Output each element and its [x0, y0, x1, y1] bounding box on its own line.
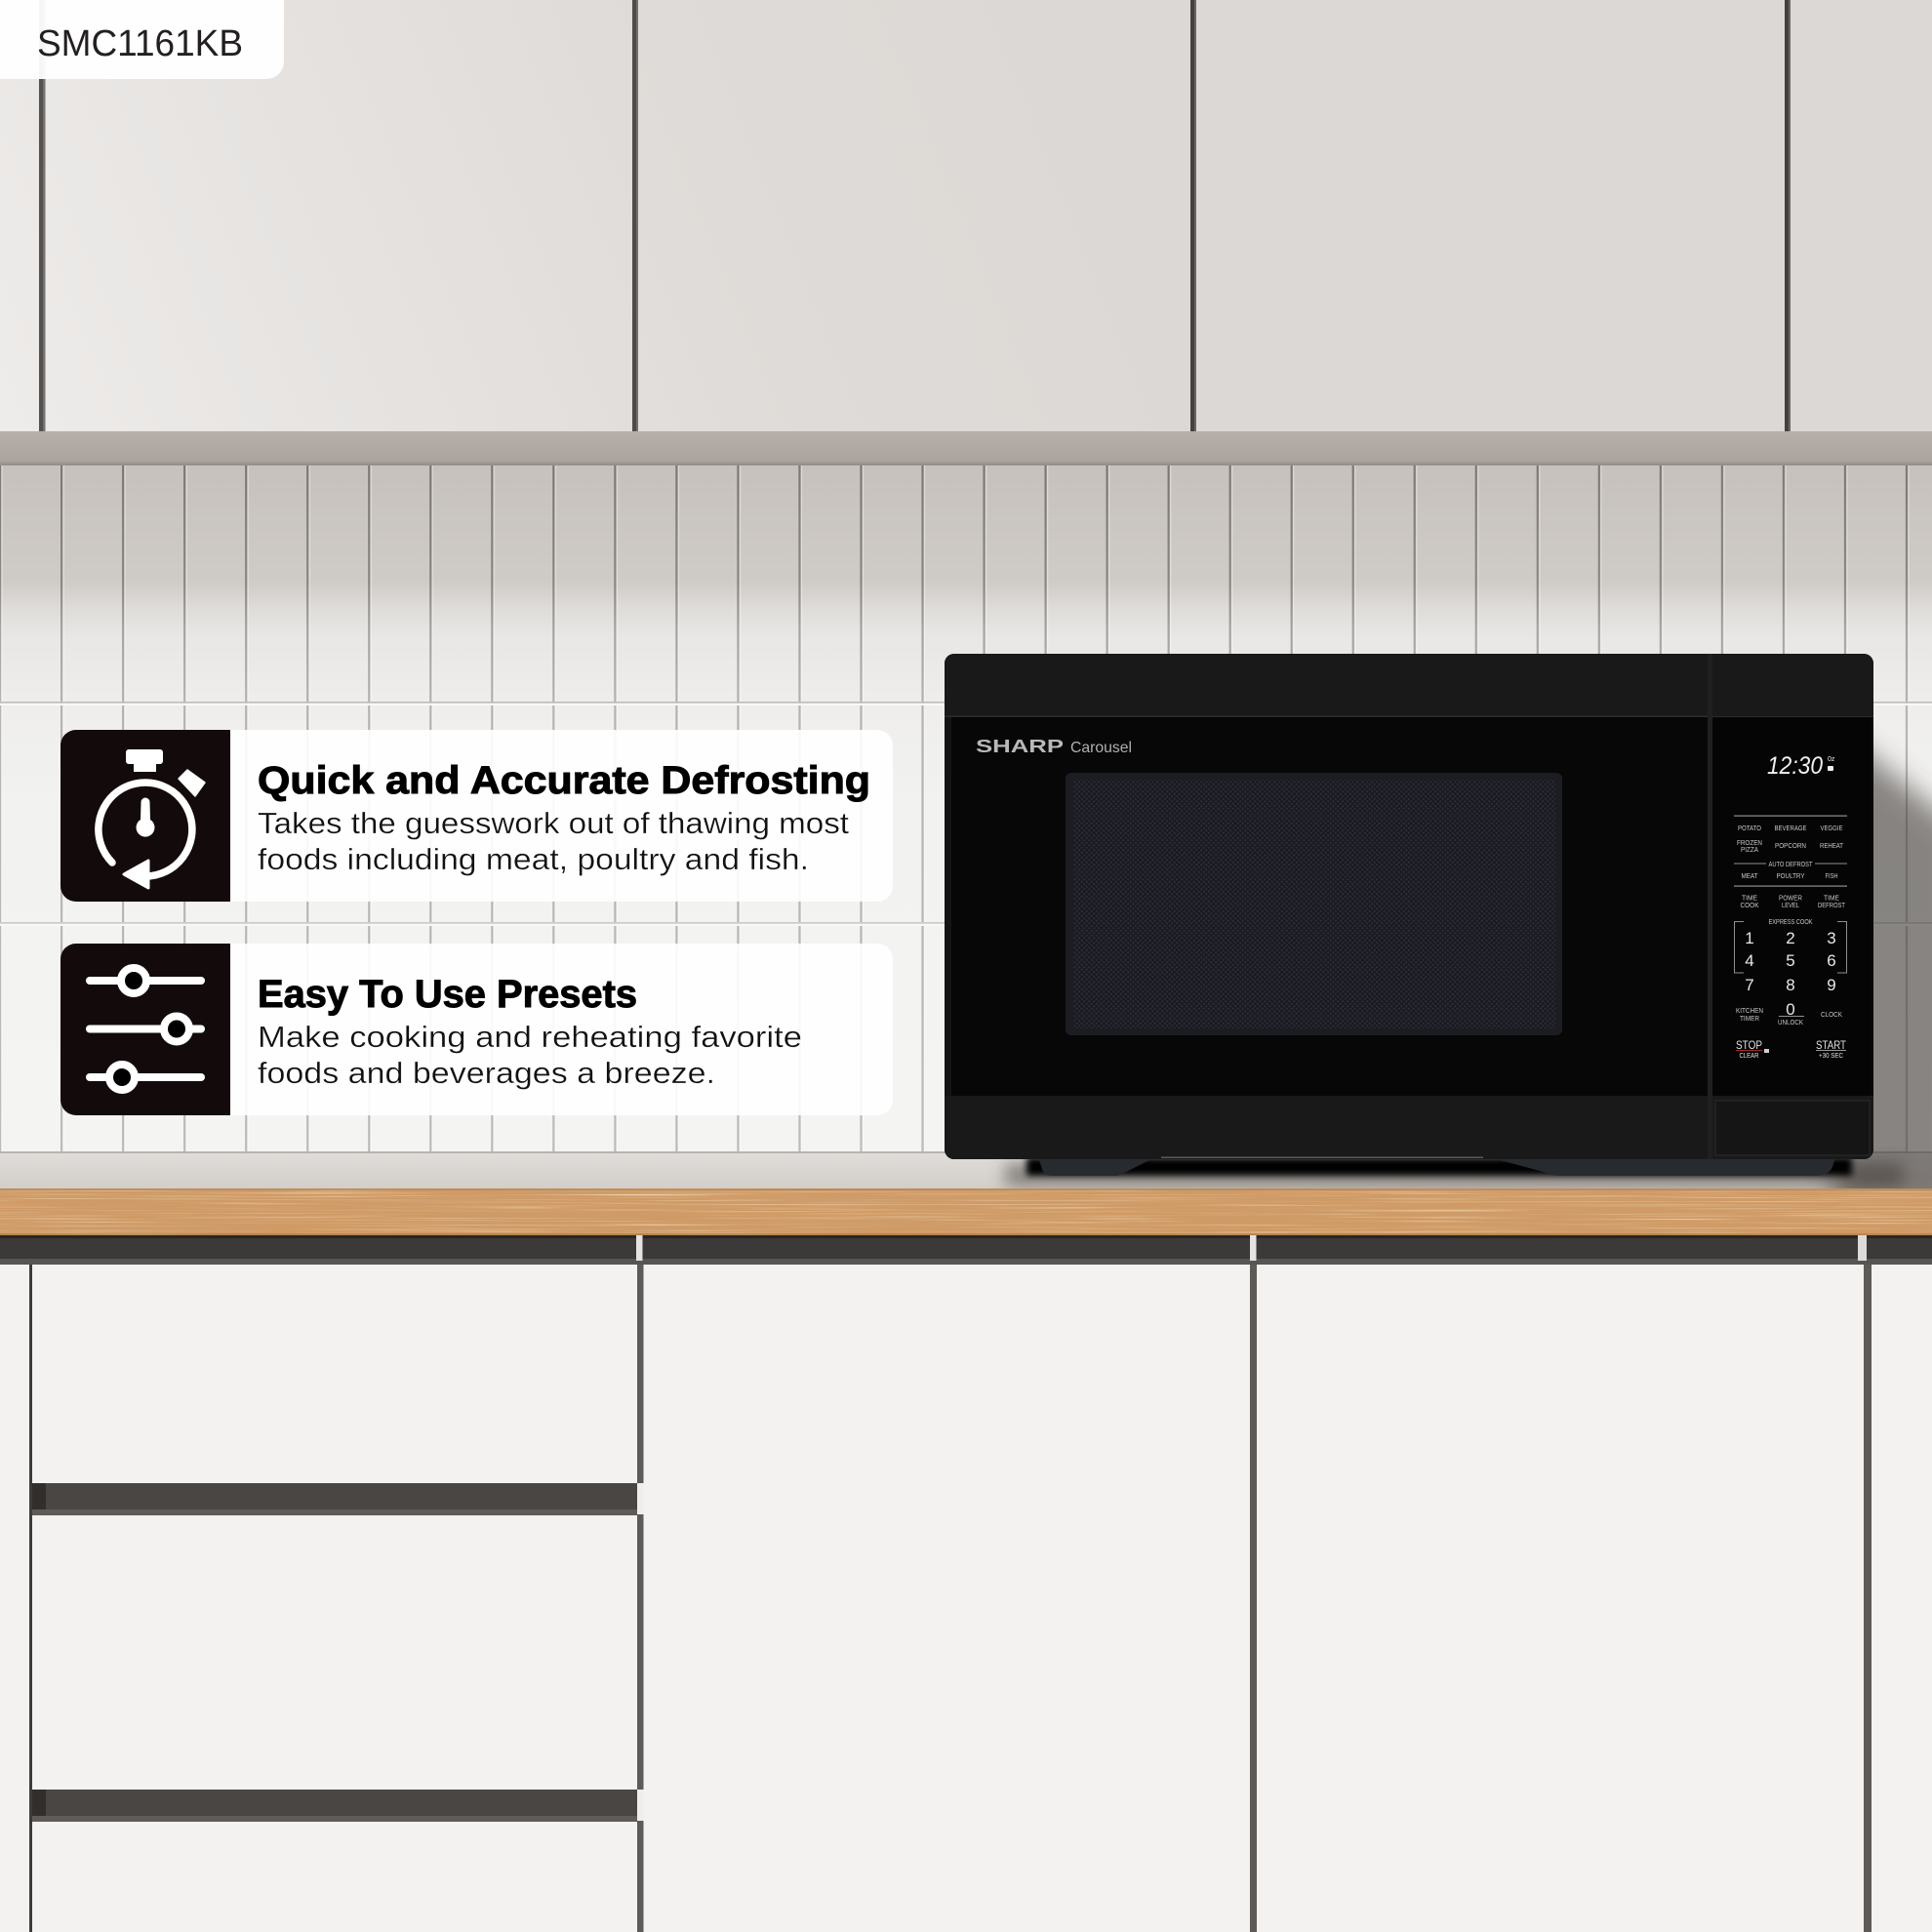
number keypad — [1745, 929, 1836, 1019]
microwave shadow on wall and counter — [1005, 727, 1932, 1210]
clock display: 0z — [1828, 756, 1835, 763]
preset labels: POULTRY — [1776, 871, 1805, 880]
bottom band — [945, 1096, 1873, 1159]
icon: sliders — [60, 944, 230, 1115]
number keypad: 7 — [1745, 976, 1754, 994]
preset labels: TIME — [1742, 894, 1757, 902]
function labels: UNLOCK — [1778, 1018, 1803, 1026]
start button: START — [1816, 1040, 1846, 1052]
number keypad: 8 — [1786, 976, 1795, 994]
drawer handle upper — [32, 1483, 644, 1515]
body text: Takes the guesswork out of thawing most — [258, 806, 849, 840]
preset labels: VEGGIE — [1821, 824, 1842, 832]
door and panel divider — [1708, 654, 1712, 1159]
function labels: KITCHEN — [1736, 1006, 1763, 1015]
soffit band under cabinets — [0, 431, 1932, 465]
door viewing window — [1066, 773, 1562, 1035]
brand logo Carousel: Carousel — [1070, 740, 1132, 756]
preset labels: TIME — [1824, 894, 1839, 902]
body text: Make cooking and reheating favorite — [258, 1020, 802, 1054]
panel: quick and accurate defrosting — [60, 730, 893, 902]
preset labels: EXPRESS COOK — [1768, 917, 1813, 926]
function labels: CLOCK — [1821, 1010, 1842, 1019]
heading: Easy To Use Presets — [258, 973, 637, 1016]
preset labels: PIZZA — [1741, 845, 1758, 854]
brand logo SHARP: SHARP — [976, 737, 1064, 756]
microwave feet — [1038, 1157, 1835, 1176]
preset labels: COOK — [1741, 901, 1758, 909]
preset labels: DEFROST — [1818, 901, 1845, 909]
number keypad: 5 — [1786, 951, 1795, 970]
number keypad: 3 — [1827, 929, 1836, 947]
number keypad: 2 — [1786, 929, 1795, 947]
tile backsplash — [0, 465, 1932, 1153]
number keypad: 0 — [1786, 1000, 1795, 1019]
start button — [1816, 1040, 1846, 1060]
door frame left edge — [945, 717, 951, 1098]
upper cabinets — [0, 0, 1932, 433]
preset labels — [1734, 816, 1847, 973]
drawer handle lower — [32, 1790, 644, 1822]
number keypad: 4 — [1745, 951, 1754, 970]
panel: easy to use presets — [60, 944, 893, 1115]
preset labels: AUTO DEFROST — [1768, 860, 1813, 868]
model badge: SMC1161KB — [37, 23, 243, 64]
preset labels: POTATO — [1738, 824, 1761, 832]
preset labels: BEVERAGE — [1774, 824, 1807, 832]
wood countertop edge — [0, 1188, 1932, 1235]
icon: stopwatch — [60, 730, 230, 902]
number keypad: 1 — [1745, 929, 1754, 947]
microwave — [945, 654, 1873, 1176]
top band — [945, 654, 1873, 717]
stop button — [1736, 1040, 1769, 1060]
stop button: STOP — [1736, 1040, 1762, 1052]
body text: foods including meat, poultry and fish. — [258, 842, 809, 876]
model badge — [0, 0, 284, 79]
clock display: 12:30 — [1767, 752, 1823, 780]
lower cabinet doors — [0, 1235, 1932, 1932]
body text: foods and beverages a breeze. — [258, 1056, 715, 1090]
preset labels: FISH — [1825, 871, 1838, 880]
preset labels: POPCORN — [1775, 841, 1806, 850]
body text — [258, 1020, 802, 1090]
preset labels: MEAT — [1741, 871, 1758, 880]
body text — [258, 806, 849, 876]
card background — [230, 944, 893, 1115]
microwave body — [945, 654, 1873, 1159]
preset labels: REHEAT — [1820, 841, 1843, 850]
lower cabinet recess — [0, 1235, 1932, 1265]
number keypad: 6 — [1827, 951, 1836, 970]
start button: +30 SEC — [1819, 1053, 1843, 1060]
function labels — [1736, 1006, 1842, 1026]
countertop back surface — [0, 1153, 1932, 1188]
stop button: CLEAR — [1739, 1053, 1758, 1060]
function labels: TIMER — [1740, 1014, 1759, 1023]
heading: Quick and Accurate Defrosting — [258, 759, 870, 802]
control panel — [1713, 717, 1871, 1155]
number keypad: 9 — [1827, 976, 1836, 994]
preset labels: POWER — [1779, 894, 1802, 902]
preset labels: LEVEL — [1782, 901, 1799, 909]
card background — [230, 730, 893, 902]
preset labels: FROZEN — [1737, 838, 1762, 847]
